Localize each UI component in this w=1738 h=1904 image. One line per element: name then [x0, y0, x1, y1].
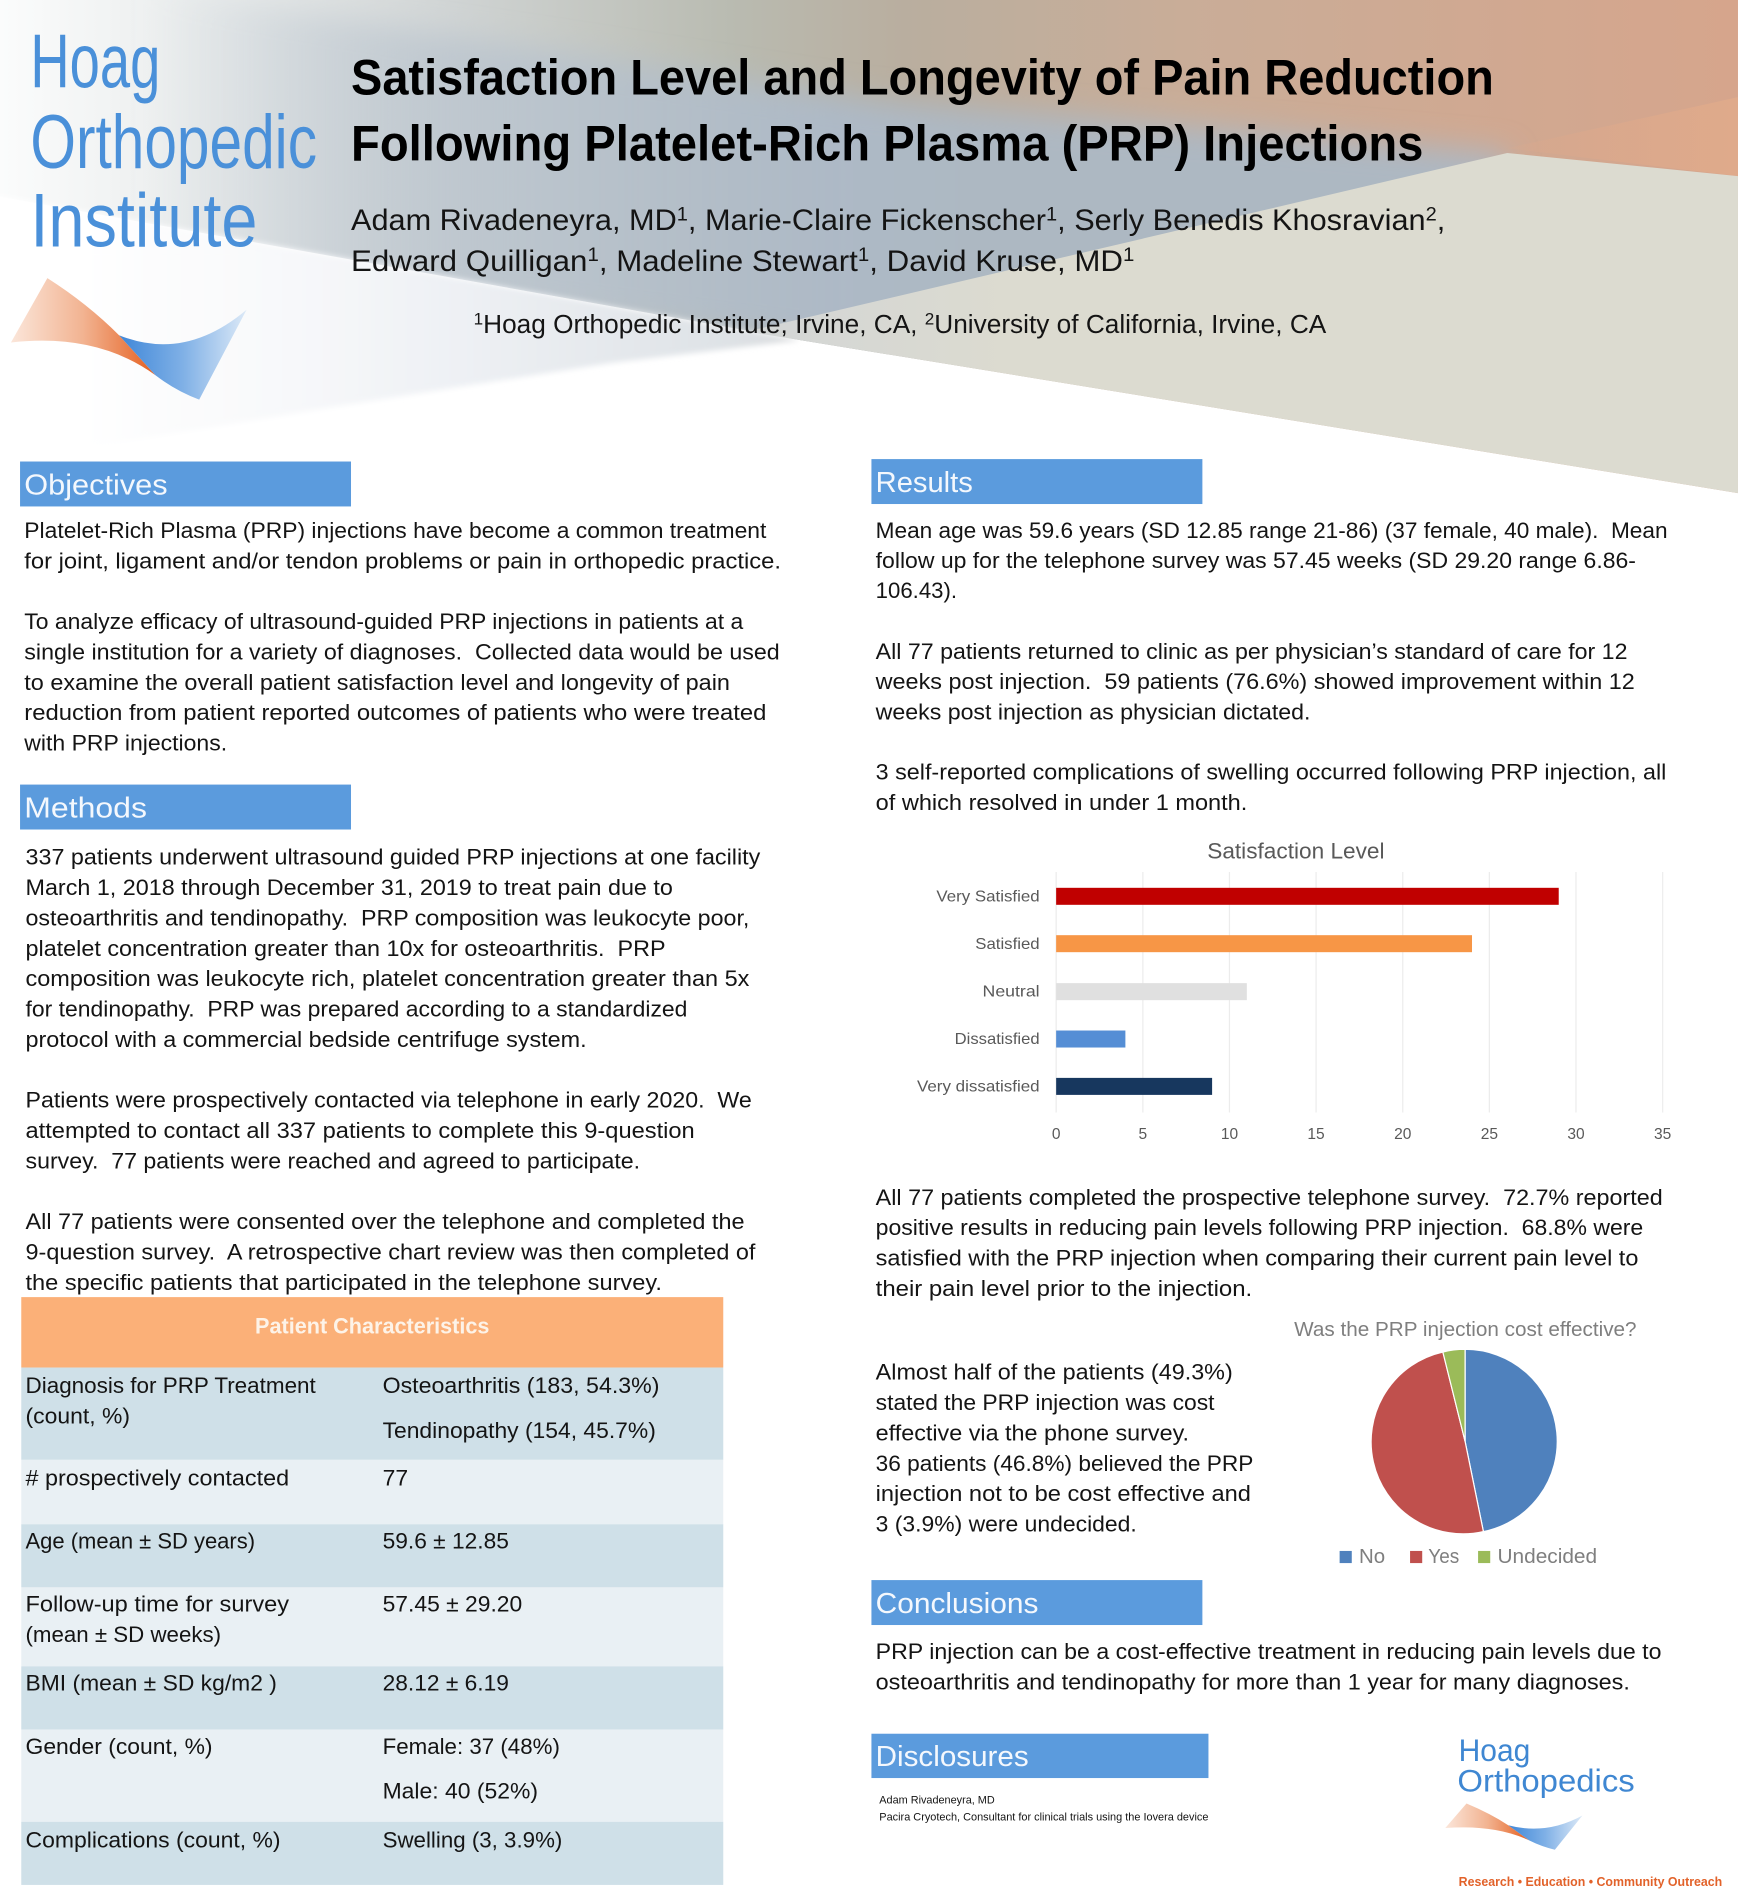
- heading: methods: Methods: [24, 792, 147, 824]
- row: follow-up: [21, 1587, 723, 1666]
- authors: 1: [1046, 203, 1057, 225]
- pie slices: [1371, 1349, 1557, 1534]
- row: follow-up: (mean ± SD weeks): [26, 1622, 221, 1647]
- category labels: [917, 889, 1040, 1095]
- text: objectives body: [23, 518, 781, 756]
- text: methods body: protocol with a commercial bedside centrifuge system.: [26, 1027, 587, 1052]
- value axis labels: 35: [1654, 1126, 1671, 1143]
- banner background: [0, 0, 1738, 493]
- affiliations: 1: [474, 309, 483, 328]
- logo: Hoag Orthopedics: Orthopedics: [1457, 1762, 1635, 1798]
- authors: , Marie-Claire Fickenscher: [688, 204, 1046, 237]
- text: survey results: All 77 patients completed the prospective telephone survey. 72.7% reported: [876, 1185, 1663, 1210]
- row: gender: [21, 1729, 723, 1822]
- affiliations: Hoag Orthopedic Institute; Irvine, CA,: [483, 309, 925, 339]
- authors: 1: [1123, 244, 1134, 266]
- legend: Yes: [1428, 1545, 1459, 1568]
- text: methods body: 9-question survey. A retrospective chart review was then completed of: [26, 1239, 756, 1264]
- text: survey results: their pain level prior to the injection.: [876, 1276, 1252, 1301]
- text: methods body: the specific patients that participated in the telephone survey.: [26, 1270, 662, 1295]
- category labels: Neutral: [983, 983, 1040, 1000]
- heading: objectives: [20, 462, 351, 506]
- text: results intro: All 77 patients returned to clinic as per physician’s standard of care for 12: [876, 639, 1627, 664]
- authors: Adam Rivadeneyra, MD: [351, 204, 667, 237]
- text: cost effectiveness: 3 (3.9%) were undecided.: [876, 1512, 1137, 1537]
- authors: , Serly Benedis Khosravian: [1057, 204, 1426, 237]
- text: results intro: weeks post injection. 59 patients (76.6%) showed improvement within 12: [875, 669, 1635, 694]
- text: survey results: satisfied with the PRP injection when comparing their current pain level to: [876, 1246, 1638, 1271]
- value axis labels: [1052, 1126, 1671, 1143]
- row: follow-up: 57.45 ± 29.20: [383, 1592, 522, 1617]
- tagline: Research • Education • Community Outreach: [1459, 1874, 1722, 1889]
- heading: conclusions: Conclusions: [876, 1588, 1038, 1620]
- authors: 1: [858, 244, 869, 266]
- row: gender: Male: 40 (52%): [383, 1779, 538, 1804]
- authors: ,: [1437, 204, 1445, 237]
- text: cost effectiveness: [876, 1360, 1253, 1537]
- row: gender: Female: 37 (48%): [383, 1734, 560, 1759]
- row: complications: [21, 1822, 723, 1885]
- text: disclosures body: Adam Rivadeneyra, MD: [879, 1795, 995, 1807]
- text: disclosures body: Pacira Cryotech, Consultant for clinical trials using the Iovera device: [879, 1812, 1208, 1824]
- title: Following Platelet-Rich Plasma (PRP) Injections: [351, 115, 1423, 171]
- row: age: Age (mean ± SD years): [26, 1529, 255, 1554]
- logo: Hoag Orthopedic Institute: Institute: [30, 179, 257, 264]
- row: age: 59.6 ± 12.85: [383, 1529, 509, 1554]
- authors: 1: [677, 203, 688, 225]
- row: diagnosis: Osteoarthritis (183, 54.3%): [383, 1373, 659, 1398]
- bars: [1056, 888, 1559, 1095]
- legend: No: [1359, 1545, 1385, 1568]
- affiliations: 2: [925, 309, 934, 328]
- value axis labels: 10: [1221, 1126, 1238, 1143]
- text: results intro: Mean age was 59.6 years (SD 12.85 range 21-86) (37 female, 40 male). Mean: [876, 518, 1668, 543]
- title: [351, 50, 1494, 171]
- authors: Edward Quilligan: [351, 245, 576, 278]
- heading: disclosures: [871, 1734, 1208, 1778]
- text: cost effectiveness: 36 patients (46.8%) believed the PRP: [876, 1451, 1253, 1476]
- value axis labels: 5: [1139, 1126, 1147, 1143]
- text: conclusions body: [876, 1639, 1661, 1694]
- text: methods body: [26, 845, 761, 1295]
- logo: Hoag Orthopedics: [1445, 1732, 1722, 1889]
- heading: objectives: Objectives: [24, 469, 168, 501]
- text: conclusions body: PRP injection can be a cost-effective treatment in reducing pain levels due to: [876, 1639, 1661, 1664]
- text: methods body: Patients were prospectively contacted via telephone in early 2020. We: [26, 1088, 752, 1113]
- text: survey results: positive results in reducing pain levels following PRP injection. 68.8% were: [876, 1215, 1643, 1240]
- legend: Undecided: [1498, 1545, 1597, 1568]
- value axis labels: 30: [1567, 1126, 1585, 1143]
- logo: Hoag Orthopedic Institute: Hoag: [30, 19, 160, 104]
- text: survey results: [876, 1185, 1663, 1301]
- text: methods body: survey. 77 patients were reached and agreed to participate.: [26, 1148, 640, 1173]
- text: objectives body: with PRP injections.: [23, 731, 227, 756]
- row: BMI: [21, 1666, 723, 1729]
- panel: results: [871, 459, 1671, 1568]
- authors: 1: [587, 244, 599, 266]
- table header: [21, 1297, 723, 1368]
- value axis labels: 0: [1052, 1126, 1061, 1143]
- panel: disclosures: [871, 1734, 1208, 1824]
- text: methods body: platelet concentration greater than 10x for osteoarthritis. PRP: [26, 936, 666, 961]
- category labels: Dissatisfied: [955, 1031, 1040, 1048]
- heading: results: Results: [876, 467, 973, 499]
- text: methods body: composition was leukocyte rich, platelet concentration greater than 5x: [26, 966, 749, 991]
- text: disclosures body: [879, 1795, 1208, 1824]
- pie chart: cost effectiveness: [1294, 1318, 1637, 1568]
- row: BMI: 28.12 ± 6.19: [383, 1671, 509, 1696]
- row: contacted: # prospectively contacted: [26, 1465, 289, 1490]
- text: objectives body: reduction from patient reported outcomes of patients who were treated: [24, 700, 766, 725]
- text: objectives body: for joint, ligament and/or tendon problems or pain in orthopedic practice.: [24, 548, 781, 573]
- text: cost effectiveness: effective via the phone survey.: [876, 1420, 1189, 1445]
- value axis labels: 25: [1481, 1126, 1498, 1143]
- text: objectives body: single institution for a variety of diagnoses. Collected data would be used: [24, 639, 780, 664]
- row: complications: Swelling (3, 3.9%): [383, 1827, 562, 1852]
- icon: logo swoosh: [11, 278, 247, 400]
- row: age: [21, 1524, 723, 1587]
- text: methods body: March 1, 2018 through December 31, 2019 to treat pain due to: [26, 875, 673, 900]
- row: diagnosis: Diagnosis for PRP Treatment: [26, 1373, 317, 1398]
- affiliations: University of California, Irvine, CA: [934, 309, 1327, 339]
- heading: results: [871, 459, 1202, 504]
- logo: Hoag Orthopedic Institute: Orthopedic: [30, 100, 317, 185]
- heading: disclosures: Disclosures: [876, 1741, 1029, 1773]
- panel: conclusions: [871, 1580, 1661, 1694]
- text: results intro: [875, 518, 1668, 815]
- panel: objectives: [20, 462, 781, 756]
- logo: Hoag Orthopedic Institute: [30, 19, 317, 264]
- text: methods body: All 77 patients were consented over the telephone and completed the: [26, 1209, 745, 1234]
- row: contacted: 77: [383, 1465, 408, 1490]
- category labels: Very Satisfied: [936, 889, 1040, 906]
- row: diagnosis: [21, 1368, 723, 1460]
- row: contacted: [21, 1460, 723, 1524]
- text: objectives body: Platelet-Rich Plasma (PRP) injections have become a common treatment: [24, 518, 767, 543]
- text: results intro: weeks post injection as physician dictated.: [875, 700, 1310, 725]
- row: gender: Gender (count, %): [26, 1734, 213, 1759]
- heading: methods: [20, 785, 351, 830]
- logo: Hoag Orthopedics: Hoag: [1459, 1732, 1530, 1768]
- text: results intro: follow up for the telephone survey was 57.45 weeks (SD 29.20 range 6.86-: [876, 548, 1636, 573]
- text: objectives body: To analyze efficacy of ultrasound-guided PRP injections in patients at a: [24, 609, 744, 634]
- text: conclusions body: osteoarthritis and tendinopathy for more than 1 year for many diagnoses.: [876, 1669, 1630, 1694]
- text: cost effectiveness: injection not to be cost effective and: [876, 1481, 1251, 1506]
- row: BMI: BMI (mean ± SD kg/m2 ): [26, 1671, 277, 1696]
- authors: , David Kruse, MD: [869, 245, 1123, 278]
- text: cost effectiveness: stated the PRP injection was cost: [876, 1390, 1215, 1415]
- category labels: Satisfied: [975, 936, 1040, 953]
- table: patient characteristics: [21, 1297, 723, 1885]
- row: follow-up: Follow-up time for survey: [26, 1592, 290, 1617]
- chart title: Satisfaction Level: [1207, 839, 1385, 864]
- icon: small swoosh: [1445, 1804, 1582, 1850]
- row: diagnosis: Tendinopathy (154, 45.7%): [383, 1418, 656, 1443]
- text: cost effectiveness: Almost half of the patients (49.3%): [876, 1360, 1233, 1385]
- chart title: Was the PRP injection cost effective?: [1294, 1318, 1637, 1341]
- authors: , Madeline Stewart: [599, 245, 859, 278]
- value axis labels: 20: [1394, 1126, 1412, 1143]
- bar chart: satisfaction level: [917, 839, 1671, 1143]
- text: results intro: 3 self-reported complications of swelling occurred following PRP injection, all: [876, 760, 1666, 785]
- row: diagnosis: (count, %): [26, 1403, 130, 1428]
- text: methods body: for tendinopathy. PRP was prepared according to a standardized: [26, 997, 687, 1022]
- authors: [351, 203, 1445, 278]
- title: Satisfaction Level and Longevity of Pain Reduction: [351, 50, 1494, 106]
- table header: Patient Characteristics: [255, 1314, 489, 1339]
- heading: conclusions: [871, 1580, 1202, 1625]
- panel: methods: [20, 785, 761, 1295]
- text: methods body: attempted to contact all 337 patients to complete this 9-question: [26, 1118, 695, 1143]
- authors: 2: [1426, 203, 1437, 225]
- text: methods body: 337 patients underwent ultrasound guided PRP injections at one facility: [26, 845, 761, 870]
- row: complications: Complications (count, %): [26, 1827, 281, 1852]
- text: methods body: osteoarthritis and tendinopathy. PRP composition was leukocyte poor,: [26, 905, 749, 930]
- value axis labels: 15: [1307, 1126, 1325, 1143]
- text: results intro: 106.43).: [876, 578, 957, 603]
- category labels: Very dissatisfied: [917, 1078, 1040, 1095]
- text: results intro: of which resolved in under 1 month.: [876, 790, 1247, 815]
- legend: [1340, 1545, 1597, 1568]
- text: objectives body: to examine the overall patient satisfaction level and longevity of pain: [24, 670, 730, 695]
